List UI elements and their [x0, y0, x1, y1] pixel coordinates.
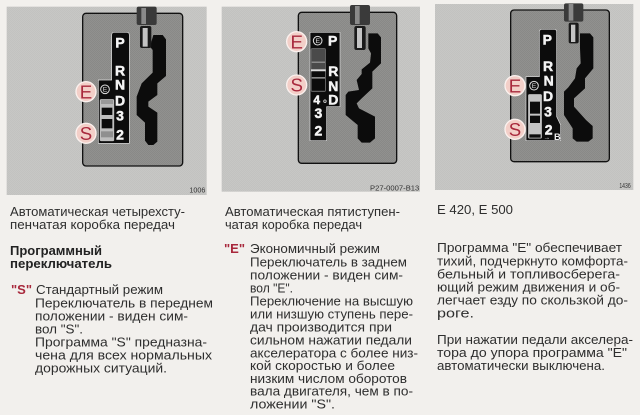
text block: program E description: Программа "Е" обеспечивает: [437, 240, 622, 255]
text block: E mode: кой скоростью и более: [250, 358, 395, 373]
program switch: E: [315, 38, 320, 45]
program switch: [311, 36, 326, 92]
text block: E mode: положении - виден сим-: [250, 268, 403, 282]
callout: E marker: [505, 75, 525, 96]
text block: kickdown note: [437, 332, 633, 373]
gear position column: D: [115, 93, 125, 109]
gear position column: 2: [314, 122, 322, 138]
heading: program switch: переключатель: [10, 256, 112, 271]
gear lever: [137, 7, 157, 48]
gear position column: N: [544, 73, 554, 89]
text block: E mode: Экономичный режим: [250, 241, 380, 256]
text block: four-speed caption: пенчатая коробка передач: [10, 217, 175, 232]
text block: program E description: ющий режим движения и об-: [437, 280, 620, 294]
text block: S mode: дорожных ситуаций.: [35, 360, 167, 376]
callout: E marker: [287, 31, 307, 52]
gear position column: B: [554, 132, 561, 142]
figure number: 1436: [619, 183, 631, 190]
heading: E 420, E 500: E 420, E 500: [437, 202, 513, 217]
callout: S marker: S: [80, 123, 92, 144]
figure number: 1006: [189, 188, 205, 195]
text block: five-speed caption: [225, 204, 400, 232]
gear position column: 3: [544, 104, 552, 120]
gear position column: N: [115, 77, 125, 93]
gear lever: [350, 5, 370, 50]
text block: program E description: тихий, подчеркнуто комфорта-: [437, 254, 628, 268]
text block: E mode: Переключатель в заднем: [250, 254, 407, 270]
text block: S mode: вол "S".: [35, 322, 83, 336]
program switch: [528, 81, 542, 138]
text block: five-speed caption: Автоматическая пятиступен-: [225, 204, 400, 219]
heading: program switch: [10, 243, 112, 271]
gear position column: P: [328, 33, 337, 49]
gear position column: R: [543, 58, 553, 74]
text block: S mode: [11, 282, 213, 376]
gear lever: [564, 3, 583, 43]
text block: S mode: Программа "S" предназна-: [35, 334, 207, 350]
callout: E marker: E: [80, 81, 92, 102]
gear position column: [526, 29, 561, 142]
shift slot: [346, 33, 381, 143]
text block: kickdown note: автоматически выключена.: [437, 358, 605, 373]
text block: four-speed caption: Автоматическая четырехсту-: [10, 204, 185, 219]
text block: S mode: Стандартный режим: [36, 282, 163, 297]
callout: S marker: S: [509, 119, 521, 140]
callout: S marker: [287, 75, 307, 96]
gear position column: D: [328, 91, 338, 107]
text block: E mode: ложении "S".: [250, 396, 335, 412]
text block: program E description: [437, 240, 628, 320]
gear position column: R: [328, 63, 338, 79]
callout: S marker: [505, 119, 525, 140]
gear position column: D: [543, 88, 553, 104]
text block: E mode: [224, 241, 418, 412]
panel: five-speed gear selector diagram: [222, 5, 420, 192]
text block: E mode: низким числом оборотов: [250, 371, 407, 386]
text block: E mode: дач производится при: [250, 320, 392, 334]
heading: program switch: Программный: [10, 243, 102, 258]
panel: four-speed gear selector diagram: [7, 7, 207, 195]
callout: E marker: [76, 81, 96, 102]
text block: S mode: положении - виден сим-: [35, 308, 188, 324]
text block: four-speed caption: [10, 204, 185, 232]
shift slot: [564, 33, 593, 142]
gear position column: N: [328, 78, 338, 94]
gear position column: →: [543, 134, 550, 141]
text block: kickdown note: При нажатии педали акселера-: [437, 332, 633, 347]
gear position column: 3: [314, 105, 322, 121]
gear position column: 3: [116, 107, 124, 123]
callout: E marker: E: [290, 31, 303, 52]
text block: E mode: вала двигателя, чем в по-: [250, 384, 413, 398]
gear position column: R: [115, 63, 125, 79]
panel: E 420, E 500 gear selector diagram: [435, 3, 633, 190]
text block: E mode: Переключение на высшую: [250, 294, 413, 308]
text block: program E description: легчает езду по скользкой до-: [437, 292, 628, 308]
text block: S mode: "S": [11, 282, 32, 297]
text block: program E description: роге.: [437, 306, 474, 320]
text block: S mode: чена для всех нормальных: [35, 348, 213, 362]
gear position column: o: [323, 99, 327, 105]
text block: E mode: или низшую ступень пере-: [250, 306, 413, 322]
program switch: [100, 85, 114, 141]
callout: E marker: E: [509, 75, 521, 96]
gear position column: P: [543, 31, 552, 47]
program switch: E: [532, 83, 537, 90]
gear position column: P: [115, 35, 125, 51]
gear position column: [310, 32, 340, 141]
shift slot: [137, 35, 166, 145]
text block: E mode: сильном нажатии педали: [250, 332, 412, 348]
program switch: E: [103, 87, 108, 94]
gear position column: 4: [313, 93, 320, 107]
text block: E mode: акселератора с более низ-: [250, 346, 418, 360]
text block: five-speed caption: чатая коробка передач: [225, 217, 362, 232]
text block: E mode: вол "Е".: [250, 280, 293, 296]
callout: S marker: [76, 123, 96, 144]
text block: S mode: Переключатель в переднем: [35, 296, 213, 310]
text block: E mode: "E": [224, 241, 245, 256]
gear position column: [98, 32, 129, 143]
text block: kickdown note: тора до упора программа "Е": [437, 345, 627, 360]
gear position column: 2: [545, 122, 553, 138]
text block: program E description: бельный и топливосберега-: [437, 266, 620, 282]
gear position column: 2: [116, 127, 124, 143]
callout: S marker: S: [290, 75, 303, 96]
figure number: P27-0007-B13: [370, 185, 419, 192]
